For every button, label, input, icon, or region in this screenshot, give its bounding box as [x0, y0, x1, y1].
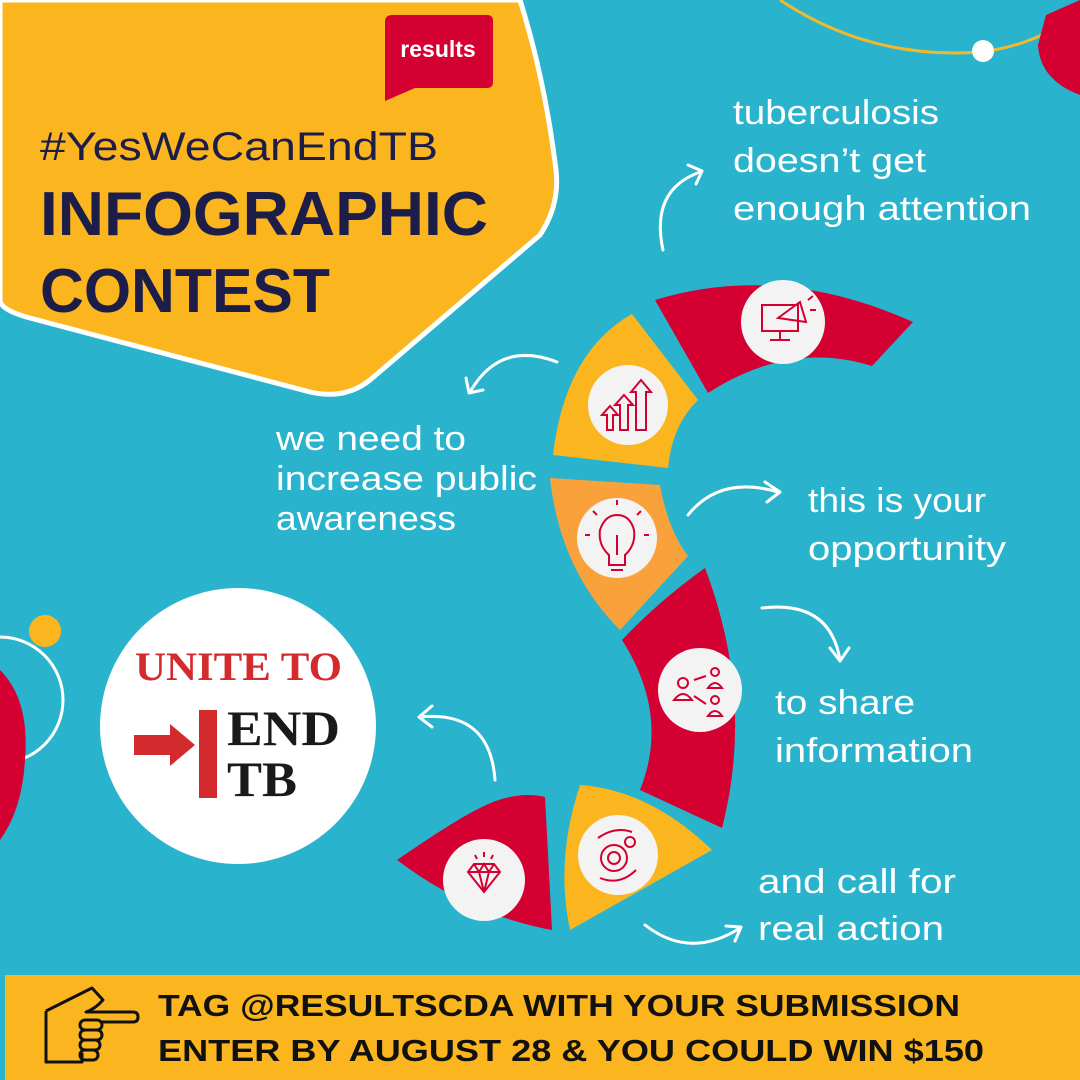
text: share information: to share: [775, 684, 915, 722]
text: public awareness: [275, 420, 537, 538]
badge: unite to end TB: END: [227, 700, 340, 756]
icon: pointing hand: [46, 988, 138, 1062]
text: share information: information: [775, 732, 973, 770]
title: CONTEST: [40, 257, 330, 326]
text: real action: real action: [758, 910, 944, 948]
title: [40, 180, 488, 326]
text: opportunity: this is your: [808, 482, 986, 520]
text: public awareness: increase public: [276, 460, 537, 498]
text: opportunity: [808, 482, 1006, 568]
footer bar: ENTER BY AUGUST 28 & YOU COULD WIN $150: [158, 1033, 984, 1068]
text: tuberculosis: tuberculosis: [733, 94, 939, 132]
arrows: [419, 165, 849, 943]
text: real action: [758, 863, 956, 948]
text: public awareness: we need to: [275, 420, 466, 458]
segment 1: red top (megaphone): [655, 280, 913, 393]
decoration: left circles: [0, 615, 63, 840]
text: real action: and call for: [758, 863, 956, 901]
text: tuberculosis: enough attention: [733, 190, 1031, 228]
decoration: top right arc: [780, 0, 1080, 95]
text: share information: [775, 684, 973, 770]
segment 4: red (share people): [622, 568, 742, 828]
footer bar: [5, 975, 1080, 1080]
badge: unite to end TB: [100, 588, 376, 864]
segment 3: orange (lightbulb): [550, 478, 688, 630]
text: opportunity: opportunity: [808, 530, 1006, 568]
hashtag: #YesWeCanEndTB: [40, 125, 438, 169]
logo: results: results: [400, 36, 476, 62]
text: tuberculosis: [733, 94, 1031, 228]
logo: results: [385, 15, 493, 101]
title: INFOGRAPHIC: [40, 180, 488, 249]
footer text: TAG @RESULTSCDA WITH YOUR SUBMISSION: [158, 988, 960, 1023]
badge: unite to end TB: UNITE TO: [135, 644, 342, 689]
segment 2: yellow (growth arrows): [553, 314, 698, 468]
segment 5: yellow (gear): [564, 785, 712, 930]
badge: unite to end TB: TB: [227, 751, 297, 807]
segment 6: red (diamond): [397, 795, 552, 930]
text: public awareness: awareness: [276, 500, 456, 538]
text: tuberculosis: doesn’t get: [733, 142, 927, 180]
panel: title blob: [0, 0, 557, 394]
